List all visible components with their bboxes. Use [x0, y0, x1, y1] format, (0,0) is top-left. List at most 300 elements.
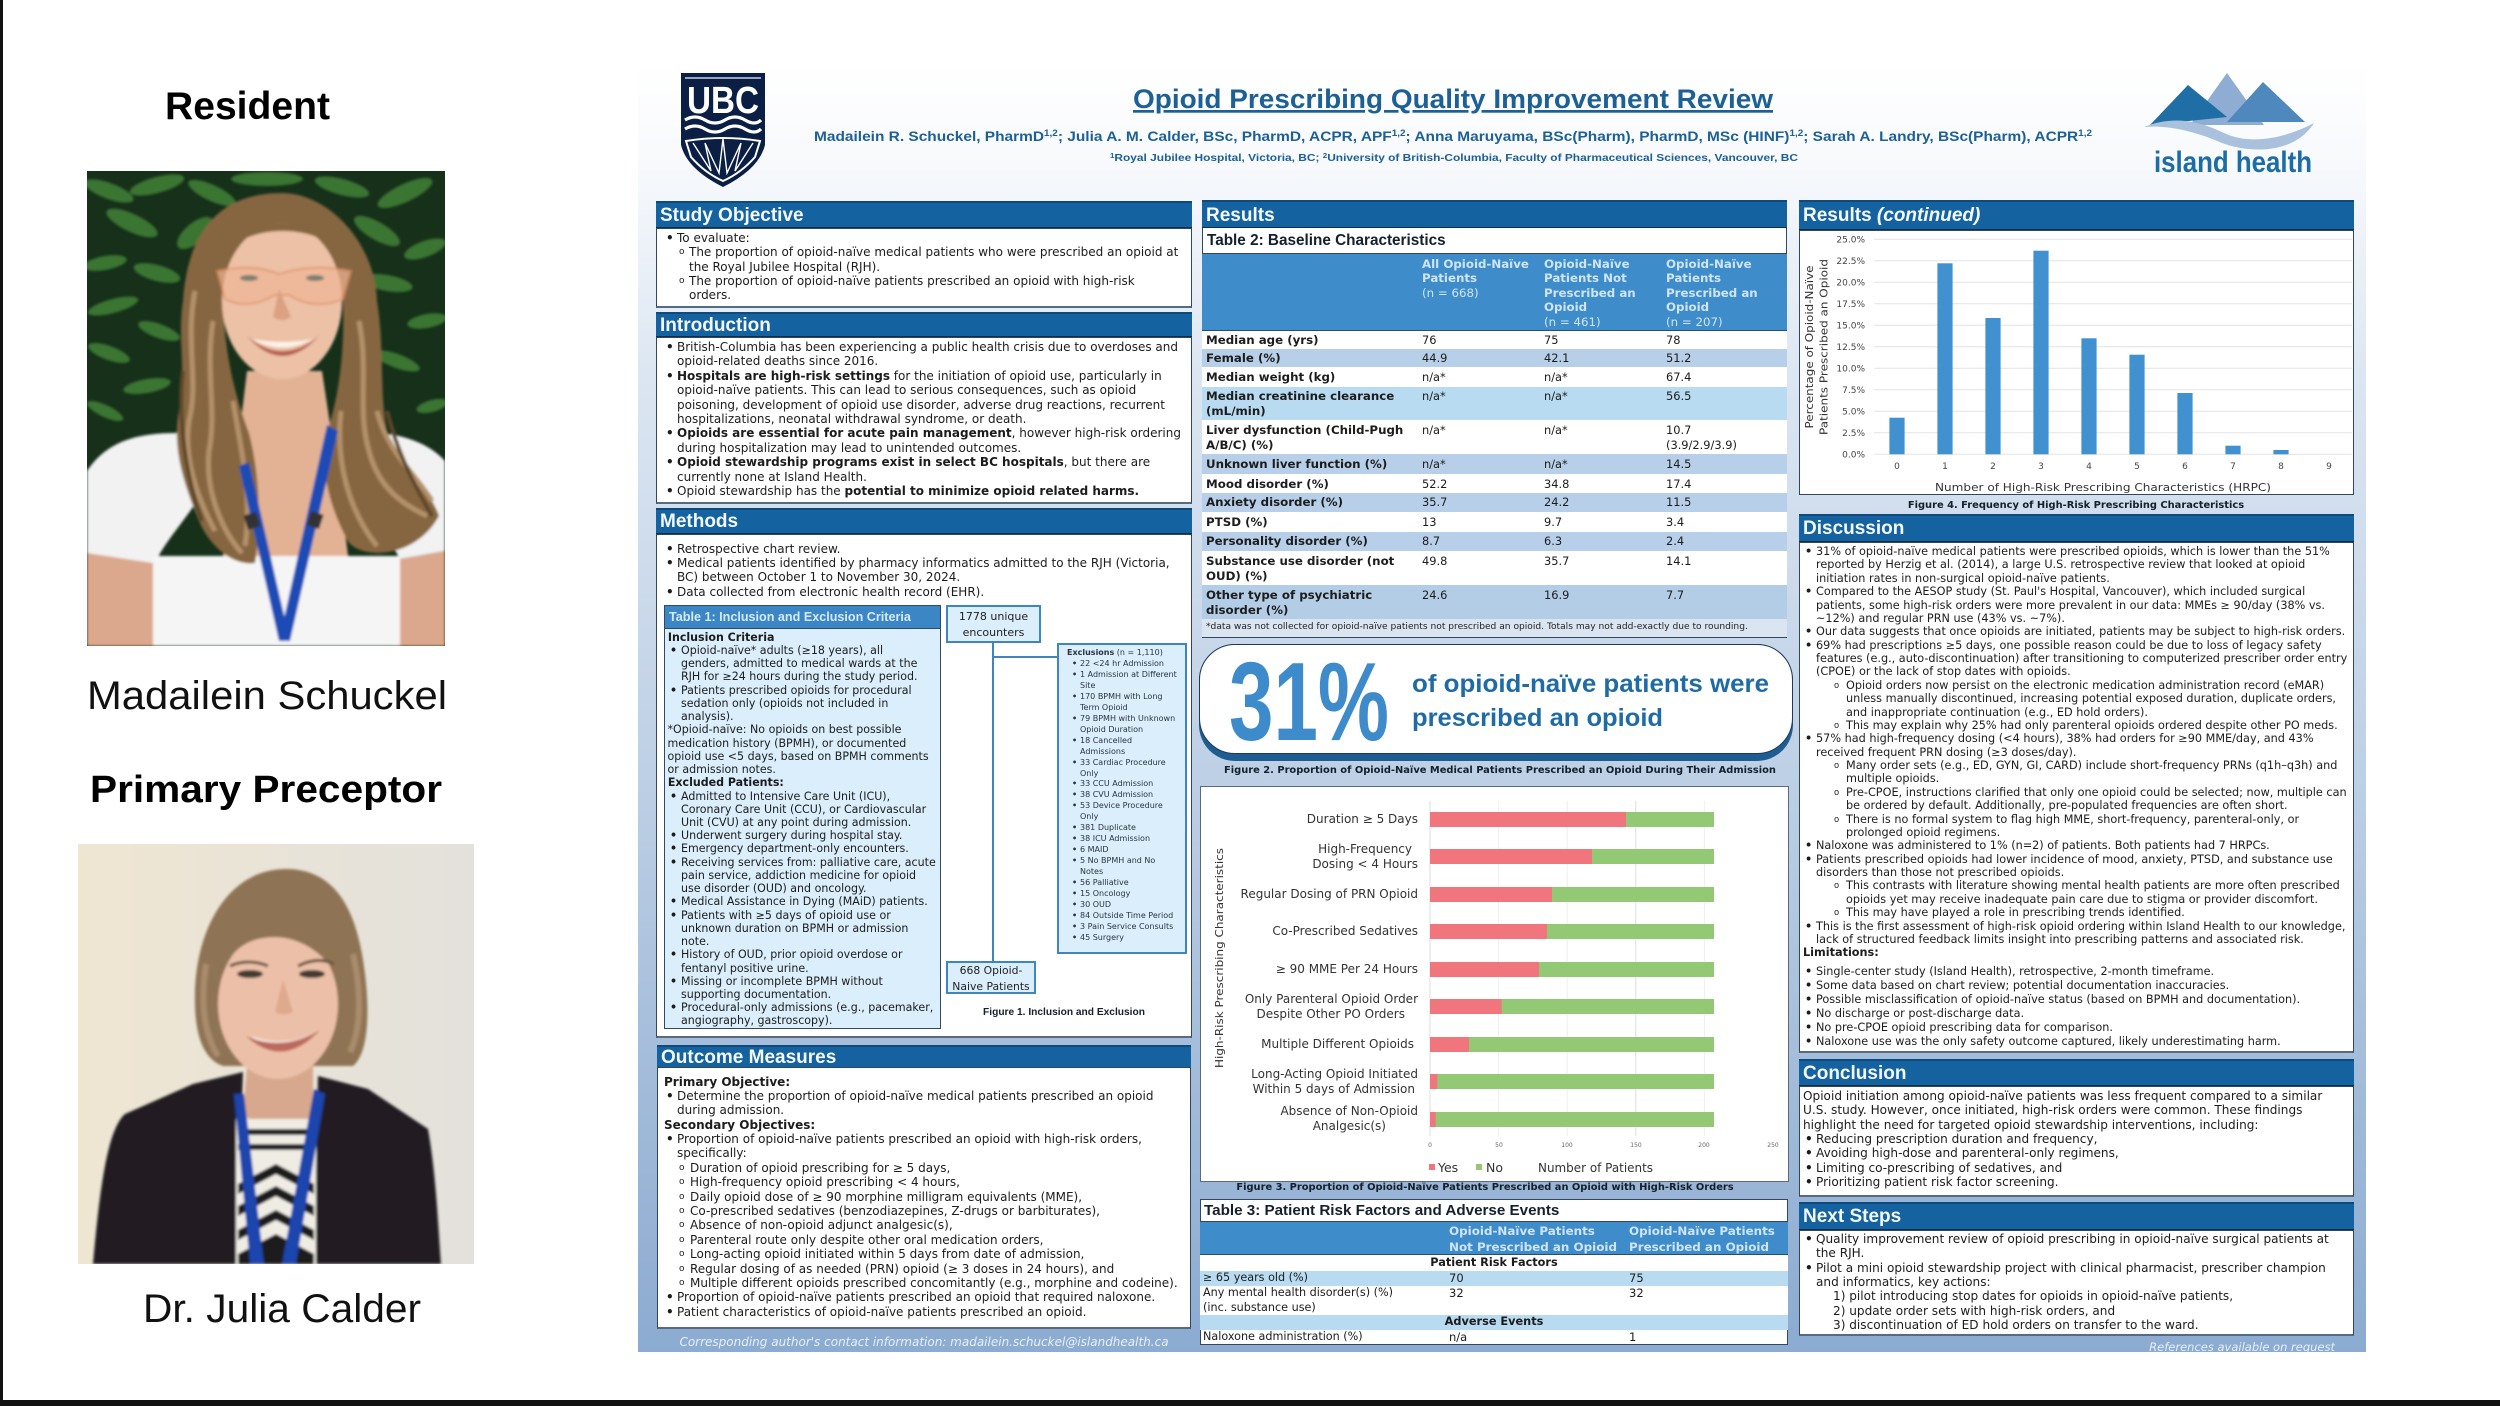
bars [1889, 251, 2289, 454]
table 2 row: substance use: 14.1 [1666, 554, 1691, 568]
table 2 row: mood: Mood disorder (%) [1206, 477, 1329, 491]
panel: study objective [656, 201, 1192, 308]
table 2 row: creatinine: (mL/min) [1206, 404, 1266, 418]
callout text: of opioid-naïve patients were [1412, 670, 1769, 698]
body: introduction [656, 337, 1192, 504]
table 1 text: use disorder (OUD) and oncology. [681, 882, 866, 895]
table 2 row: female: 44.9 [1422, 351, 1447, 365]
heading: outcome measures [657, 1045, 1191, 1068]
table 2 row: weight: 67.4 [1666, 370, 1691, 384]
category labels: Dosing < 4 Hours [1312, 857, 1418, 871]
text: discussion list [1803, 545, 2347, 959]
table 2 row: liver dysfunction [1202, 420, 1787, 454]
affiliations: University of British-Columbia, Faculty of Pharmaceutical Sciences, Vancouver, BC [1327, 152, 1798, 164]
table 2 row: unknown liver: n/a* [1544, 457, 1568, 471]
figure 1 caption: Figure 1. Inclusion and Exclusion [983, 1007, 1145, 1018]
table 2 header: Opioid-Naïve [1544, 257, 1630, 271]
affiliations [1110, 152, 1798, 164]
table 2 row: PTSD: 3.4 [1666, 515, 1684, 529]
table 2 row: mood: 17.4 [1666, 477, 1691, 491]
text: introduction list: Opioids are essential for acute pain management, however high-risk ordering [677, 426, 1181, 440]
table 2 row: female: 51.2 [1666, 351, 1691, 365]
table 2 row: anxiety: 35.7 [1422, 495, 1447, 509]
x axis ticks: 0 [1428, 1142, 1432, 1149]
callout: 31 percent [1199, 644, 1793, 761]
figure 1: exclusions text: Exclusions (n = 1,110) [1067, 648, 1163, 657]
table 1 text: Missing or incomplete BPMH without [681, 975, 883, 988]
text: conclusion [1803, 1089, 2322, 1189]
body: next steps [1799, 1230, 2354, 1336]
table 2 header: (n = 461) [1544, 315, 1601, 329]
category labels: Co-Prescribed Sedatives [1272, 924, 1418, 938]
text: objectives list: The proportion of opioid-naïve patients prescribed an opioid with high-risk [689, 274, 1135, 288]
table 2 row: other psychiatric: 16.9 [1544, 588, 1569, 602]
wavy hair [177, 193, 439, 563]
text: outcome measures list: specifically: [677, 1146, 747, 1160]
table 3 row: mental health: Any mental health disorder(s) (%) [1203, 1286, 1393, 1299]
text: outcome measures list: Parenteral route only despite other oral medication orders, [690, 1233, 1043, 1247]
table 1 text: Emergency department-only encounters. [681, 842, 909, 855]
table 2 row: liver dysfunction: n/a* [1544, 423, 1568, 437]
resident heading: Resident [165, 85, 330, 128]
heading: study objective [656, 201, 1192, 228]
figure 1: encounters box: 1778 unique [959, 610, 1028, 623]
primary preceptor heading: Primary Preceptor [90, 769, 442, 811]
figure 4 caption: Figure 4. Frequency of High-Risk Prescribing Characteristics [1908, 500, 2244, 511]
text: discussion list: ~12%) and regular PRN use (43% vs. ~7%). [1816, 612, 2065, 625]
text: conclusion: Prioritizing patient risk factor screening. [1816, 1175, 2059, 1189]
table 2 row: PTSD: PTSD (%) [1206, 515, 1268, 529]
table 2 row: median age: Median age (yrs) [1206, 333, 1319, 347]
text: conclusion: Limiting co-prescribing of sedatives, and [1816, 1161, 2062, 1175]
text: outcome measures list: Co-prescribed sedatives (benzodiazepines, Z-drugs or barbiturates), [690, 1204, 1100, 1218]
x axis ticks: 2 [1990, 462, 1996, 472]
table 2 row: substance use: Substance use disorder (not [1206, 554, 1394, 568]
table 3 title [1200, 1199, 1788, 1222]
text: outcome measures list: Proportion of opioid-naïve patients prescribed an opioid with high-risk orders, [677, 1132, 1142, 1146]
table 2 row: personality: 2.4 [1666, 534, 1684, 548]
heading: conclusion: Conclusion [1803, 1063, 1906, 1084]
shirt [87, 433, 197, 571]
table 1 text [668, 631, 936, 1027]
x axis ticks: 4 [2086, 462, 2092, 472]
legend: No [1486, 1160, 1503, 1175]
y axis ticks: 15.0% [1836, 322, 1865, 332]
figure 1: exclusions text: 6 MAID [1080, 845, 1109, 854]
table 2 header: Patients Not [1544, 271, 1627, 285]
text: discussion list: This may explain why 25% had only parenteral opioids ordered despite other PO meds. [1846, 719, 2338, 732]
table 1 text: History of OUD, prior opioid overdose or [681, 948, 902, 961]
figure 1: exclusions text: Site [1080, 681, 1095, 690]
table 2 row: personality: 8.7 [1422, 534, 1440, 548]
table 1 text: Excluded Patients: [668, 776, 784, 789]
table 2 header [1202, 254, 1787, 331]
table 2 row: unknown liver [1202, 454, 1787, 474]
table 1 text: Admitted to Intensive Care Unit (ICU), [681, 790, 890, 802]
x axis ticks: 3 [2038, 462, 2044, 472]
text: discussion list: This is the first assessment of high-risk opioid ordering within Island Health to our knowledge, [1816, 920, 2345, 933]
body: study objective [656, 228, 1192, 308]
text: introduction list: poisoning, development of opioid use disorder, adverse drug reactions, recurrent [677, 398, 1165, 412]
text: conclusion: Avoiding high-dose and parenteral-only regimens, [1816, 1146, 2119, 1160]
figure 1: exclusions text: 30 OUD [1080, 900, 1111, 909]
chest [222, 371, 349, 563]
text: discussion list: lack of structured feedback limits insight into prescribing patterns and associated risk. [1816, 933, 2304, 946]
blazer [93, 1072, 243, 1264]
top stripes [236, 1119, 316, 1264]
text: limitations list: Some data based on chart review; potential documentation inaccuracies. [1816, 979, 2229, 992]
photo: resident portrait [87, 171, 445, 646]
y axis ticks: 22.5% [1836, 257, 1865, 267]
table 2 row: weight: Median weight (kg) [1206, 370, 1335, 384]
table 3 header [1200, 1222, 1788, 1255]
heading: results [1202, 200, 1787, 228]
text: limitations list: Possible misclassification of opioid-naïve status (based on BPMH and documentation). [1816, 993, 2300, 1006]
affiliations: Royal Jubilee Hospital, Victoria, BC; [1114, 152, 1323, 164]
text: discussion list: Our data suggests that once opioids are initiated, patients may be subject to high-risk orders. [1816, 625, 2345, 638]
figure 1: exclusions text: 15 Oncology [1080, 889, 1130, 898]
body: discussion [1799, 542, 2354, 1053]
table 2 row: personality: Personality disorder (%) [1206, 534, 1368, 548]
figure 1: exclusions text: 45 Surgery [1080, 933, 1124, 942]
text: discussion list: features (e.g., auto-discontinuation) after transitioning to computerized prescriber order entry [1816, 652, 2347, 665]
table 2 row: anxiety: Anxiety disorder (%) [1206, 495, 1343, 509]
text: objectives list: The proportion of opioid-naïve medical patients who were prescribed an opioid at [689, 245, 1178, 259]
table 2 title: Table 2: Baseline Characteristics [1207, 232, 1446, 249]
figure 1: exclusions text: Only [1080, 812, 1098, 821]
table 2 row: liver dysfunction: Liver dysfunction (Child-Pugh [1206, 423, 1403, 437]
icon: UBC logo [681, 73, 765, 187]
text: introduction list: hospitalizations, neonatal withdrawal syndrome, or death. [677, 412, 1026, 426]
table 2 row: PTSD [1202, 512, 1787, 532]
figure 1: encounters box [946, 605, 1041, 643]
table 1 text: Medical Assistance in Dying (MAiD) patients. [681, 895, 928, 908]
table 3 row: naloxone: 1 [1629, 1330, 1636, 1344]
figure 1: exclusions text: 38 ICU Admission [1080, 834, 1150, 843]
table 2 row: creatinine: 56.5 [1666, 389, 1691, 403]
figure 1: flow connector vertical [992, 642, 994, 961]
table 2 header: Opioid [1666, 300, 1709, 314]
table 2 row: other psychiatric: Other type of psychiatric [1206, 588, 1372, 602]
text: introduction list: British-Columbia has been experiencing a public health crisis due to overdoses and [677, 340, 1178, 354]
text: methods list: Medical patients identified by pharmacy informatics admitted to the RJH (Victoria, [677, 556, 1170, 570]
table 2 row: anxiety: 24.2 [1544, 495, 1569, 509]
table 2 row: other psychiatric: 24.6 [1422, 588, 1447, 602]
category labels: High-Frequency [1318, 842, 1412, 856]
text: next steps list [1806, 1232, 2329, 1332]
slide border bottom [0, 1400, 2500, 1406]
panel: introduction [656, 312, 1192, 504]
y axis title: Patients Prescribed an Opioid [1818, 259, 1830, 435]
x axis ticks: 8 [2278, 462, 2284, 472]
text: outcome measures list: High-frequency opioid prescribing < 4 hours, [690, 1175, 960, 1189]
x axis ticks: 0 [1894, 462, 1900, 472]
figure 1: encounters box: encounters [963, 626, 1024, 639]
figure 3: stacked bar chart [1200, 786, 1789, 1182]
table 1 text: supporting documentation. [681, 988, 831, 1001]
photo: preceptor portrait [78, 844, 474, 1264]
lanyard [234, 1094, 264, 1264]
text: discussion list: This may have played a role in prescribing trends identified. [1846, 906, 2185, 919]
category labels: Only Parenteral Opioid Order [1245, 992, 1418, 1006]
figure 1: exclusions text: 33 Cardiac Procedure [1080, 758, 1166, 767]
text: introduction list: currently none at Island Health. [677, 470, 867, 484]
heading: next steps [1799, 1202, 2354, 1230]
callout text: prescribed an opioid [1412, 704, 1663, 732]
y axis ticks: 5.0% [1842, 408, 1865, 418]
text: next steps list: and informatics, key actions: [1816, 1275, 1991, 1289]
table 2 row: weight: n/a* [1422, 370, 1446, 384]
figure 1: exclusions text: 381 Duplicate [1080, 823, 1136, 832]
table 2 row: substance use: 49.8 [1422, 554, 1447, 568]
text: limitations list: No discharge or post-discharge data. [1816, 1007, 2024, 1020]
text: introduction list: Hospitals are high-risk settings for the initiation of opioid use, particularly in [677, 369, 1162, 383]
affiliations: 2 [1323, 153, 1327, 160]
table 1 text: Opioid-naïve* adults (≥18 years), all [681, 644, 883, 657]
authors [814, 128, 2092, 144]
table 1 text: fentanyl positive urine. [681, 962, 809, 975]
table 2 row: unknown liver: 14.5 [1666, 457, 1691, 471]
table 2 row: median age: 78 [1666, 333, 1680, 347]
text: methods list: Retrospective chart review. [677, 542, 840, 556]
figure 1: final cohort box: Naive Patients [952, 980, 1030, 993]
authors: ; Sarah A. Landry, BSc(Pharm), ACPR [1803, 128, 2078, 144]
table 1 heading [664, 605, 941, 629]
table 2 row: weight: n/a* [1544, 370, 1568, 384]
heading: discussion: Discussion [1803, 518, 1904, 539]
table 2 footnote [1202, 619, 1787, 638]
figure 1: final cohort box [946, 961, 1036, 994]
table 1 text: medication history (BPMH), or documented [668, 737, 906, 750]
x axis ticks: 1 [1942, 462, 1948, 472]
table 1 text: genders, admitted to medical wards at the [681, 657, 917, 670]
text: methods list: BC) between October 1 to November 30, 2024. [677, 570, 960, 584]
category labels: Analgesic(s) [1313, 1119, 1386, 1133]
figure 1: exclusions text: 56 Palliative [1080, 878, 1129, 887]
text: discussion list: Limitations: [1803, 946, 1879, 959]
callout text [1229, 644, 1769, 761]
text: introduction list: opioid-naïve patients. This can lead to serious consequences, such as opioid [677, 383, 1136, 397]
text: next steps list: 1) pilot introducing stop dates for opioids in opioid-naïve patients, [1833, 1289, 2233, 1303]
table 2 row: other psychiatric: disorder (%) [1206, 603, 1288, 617]
text: limitations list [1806, 965, 2300, 1048]
callout shape [1199, 644, 1793, 761]
table 2 header: (n = 668) [1422, 286, 1479, 300]
text: outcome measures list: Determine the proportion of opioid-naïve medical patients prescribed an opioid [677, 1089, 1153, 1103]
table 3 row: age [1200, 1271, 1788, 1286]
figure 2 caption: Figure 2. Proportion of Opioid-Naïve Medical Patients Prescribed an Opioid During Their Admission [1224, 765, 1776, 776]
table 1 text: angiography, gastroscopy). [681, 1014, 832, 1027]
text: discussion list: multiple opioids. [1846, 772, 1939, 785]
category labels: Multiple Different Opioids [1261, 1037, 1414, 1051]
table 1 body [664, 629, 941, 1029]
footer: contact info: Corresponding author's contact information: madailein.schuckel@islandhealth.ca [679, 1335, 1169, 1349]
figure 1: exclusions text: 18 Cancelled [1080, 736, 1132, 745]
authors: 1,2 [1789, 128, 1803, 138]
table 2 row: weight [1202, 367, 1787, 387]
table 2 header: Opioid [1544, 300, 1587, 314]
authors: ; Anna Maruyama, BSc(Pharm), PharmD, MSc (HINF) [1406, 128, 1789, 144]
table 2 header: (n = 207) [1666, 315, 1723, 329]
heading: methods: Methods [660, 511, 738, 532]
table 2 row: mood: 52.2 [1422, 477, 1447, 491]
table 2 row: liver dysfunction: n/a* [1422, 423, 1446, 437]
table 3 row: age: 75 [1629, 1271, 1644, 1285]
category labels: Regular Dosing of PRN Opioid [1241, 887, 1418, 901]
text: methods list: Data collected from electronic health record (EHR). [677, 585, 984, 599]
authors: 1,2 [2078, 128, 2092, 138]
text: discussion list: reported by Herzig et al. (2014), a large U.S. retrospective review that looked at opioid [1816, 558, 2305, 571]
table 2 row: female: 42.1 [1544, 351, 1569, 365]
x axis ticks: 50 [1495, 1142, 1503, 1149]
text: outcome measures list: Proportion of opioid-naïve patients prescribed an opioid that required naloxone. [677, 1290, 1155, 1304]
text: discussion list: unless manually discontinued, increasing potential exposed duration, duplicate orders, [1846, 692, 2336, 705]
x axis ticks: 250 [1767, 1142, 1779, 1149]
table 1 text: note. [681, 935, 709, 948]
callout inner card [1199, 644, 1793, 754]
authors: Madailein R. Schuckel, PharmD [814, 128, 1023, 144]
table 2 row: anxiety: 11.5 [1666, 495, 1691, 509]
text: discussion list: Pre-CPOE, instructions clarified that only one opioid could be selected; now, multiple can [1846, 786, 2347, 799]
table 3 row: naloxone: Naloxone administration (%) [1203, 1330, 1363, 1343]
face [222, 223, 342, 379]
table 2 row: creatinine: n/a* [1544, 389, 1568, 403]
resident name: Madailein Schuckel [87, 674, 447, 718]
hair [195, 869, 367, 1066]
text: discussion list: (CPOE) or the lack of stop dates with opioids. [1816, 665, 2071, 678]
table 2 row: unknown liver: n/a* [1422, 457, 1446, 471]
table 2 header: Opioid-Naïve [1666, 257, 1752, 271]
x axis ticks: 7 [2230, 462, 2236, 472]
table 1 text: sedation only (opioids not included in [681, 697, 888, 710]
table 2 row: creatinine: n/a* [1422, 389, 1446, 403]
text: objectives list [668, 231, 1178, 302]
table 2 row: liver dysfunction: (3.9/2.9/3.9) [1666, 438, 1737, 452]
x axis ticks: 5 [2134, 462, 2140, 472]
figure 1: exclusions text: 84 Outside Time Period [1080, 911, 1173, 920]
authors: 1,2 [1392, 128, 1406, 138]
figure 1: exclusions text: Opioid Duration [1080, 725, 1143, 734]
panel: next steps [1799, 1202, 2354, 1336]
lanyard [239, 462, 290, 641]
category labels: Long-Acting Opioid Initiated [1251, 1067, 1418, 1081]
table 2 row: creatinine: Median creatinine clearance [1206, 389, 1394, 403]
table 2 row: substance use: OUD) (%) [1206, 569, 1268, 583]
text: introduction list: Opioid stewardship programs exist in select BC hospitals, but there are [677, 455, 1150, 469]
y axis ticks: 2.5% [1842, 429, 1865, 439]
x axis ticks [1428, 1142, 1779, 1149]
text: introduction list: opioid-related deaths since 2016. [677, 354, 878, 368]
text: discussion list: patients, some high-risk orders were more prevalent in our data: MMEs ≥ 90/day (38% vs. [1816, 599, 2325, 612]
figure 1: exclusions text: 3 Pain Service Consults [1080, 922, 1173, 931]
table 1 text: analysis). [681, 710, 734, 723]
table 2 row: median age [1202, 331, 1787, 349]
text: discussion list: This contrasts with literature showing mental health patients are more often prescribed [1846, 879, 2340, 892]
bars [1430, 812, 1714, 1127]
category labels: Duration ≥ 5 Days [1307, 812, 1418, 826]
text: discussion list: received frequent PRN dosing (≥3 doses/day). [1816, 746, 2077, 759]
text: introduction list: Opioid stewardship has the potential to minimize opioid related harms. [677, 484, 1139, 498]
legend [1429, 1160, 1653, 1175]
neck [243, 1054, 313, 1144]
preceptor name: Dr. Julia Calder [143, 1287, 421, 1331]
x axis ticks: 9 [2326, 462, 2332, 472]
text: outcome measures list: Primary Objective: [664, 1074, 790, 1088]
text: objectives list: orders. [689, 288, 731, 302]
text: objectives list: To evaluate: [677, 231, 750, 245]
text: discussion list: 31% of opioid-naïve medical patients were prescribed opioids, which is lower than the 51% [1816, 545, 2330, 558]
table 2 row: median age: 75 [1544, 333, 1558, 347]
table 1 text: unknown duration on BPMH or admission [681, 922, 908, 935]
heading: next steps: Next Steps [1803, 1206, 1901, 1227]
figure 1: exclusions text: Only [1080, 768, 1098, 778]
table 1 text: Procedural-only admissions (e.g., pacemaker, [681, 1001, 933, 1014]
table 2 header: All Opioid-Naïve [1422, 257, 1529, 271]
heading: study objective: Study Objective [660, 205, 804, 226]
panel: results continued [1799, 200, 2354, 495]
table 2 row: unknown liver: Unknown liver function (%) [1206, 457, 1387, 471]
text: discussion list: Naloxone was administered to 1% (n=2) of patients. Both patients had 7 HRPCs. [1816, 839, 2270, 852]
authors: 1,2 [1044, 128, 1058, 138]
table 3 header: Opioid-Naïve Patients [1629, 1224, 1775, 1238]
y axis ticks [1836, 236, 1865, 460]
text: next steps list: Quality improvement review of opioid prescribing in opioid-naïve surgical patients at [1816, 1232, 2329, 1246]
heading: results: Results [1206, 205, 1275, 226]
text: limitations list: Single-center study (Island Health), retrospective, 2-month timeframe. [1816, 965, 2214, 978]
table 2 row: female: Female (%) [1206, 351, 1281, 365]
heading: introduction: Introduction [660, 315, 771, 336]
heading: methods [656, 508, 1192, 534]
table 2 title [1202, 228, 1787, 254]
heading: conclusion [1799, 1059, 2354, 1086]
table 2 row: creatinine [1202, 387, 1787, 420]
text: next steps list: 2) update order sets with high-risk orders, and [1833, 1304, 2115, 1318]
text: discussion list: Opioid orders now persist on the electronic medication administration record (eMAR) [1846, 679, 2324, 692]
legend: Number of Patients [1538, 1160, 1653, 1175]
table 3 row: age: ≥ 65 years old (%) [1203, 1271, 1308, 1284]
table 3 row: age: 70 [1449, 1271, 1464, 1285]
figure 1: exclusions text: 38 CVU Admission [1080, 790, 1153, 799]
text: discussion list: Patients prescribed opioids had lower incidence of mood, anxiety, PTSD, and substance use [1816, 853, 2333, 866]
panel: outcome measures [657, 1045, 1191, 1329]
table 2 footnote: *data was not collected for opioid-naïve patients not prescribed an opioid. Totals may not add-exactly due to rounding. [1206, 622, 1748, 632]
table 1 text: Underwent surgery during hospital stay. [681, 829, 902, 842]
table 1 text: Receiving services from: palliative care, acute [681, 856, 936, 869]
table 1 heading: Table 1: Inclusion and Exclusion Criteria [669, 610, 911, 624]
table 2 row: median age: 76 [1422, 333, 1436, 347]
text: discussion list: Compared to the AESOP study (St. Paul's Hospital, Vancouver), which included surgical [1816, 585, 2305, 598]
table 3 row: mental health: 32 [1449, 1286, 1464, 1300]
x axis ticks: 150 [1630, 1142, 1642, 1149]
heading: results continued [1799, 200, 2354, 230]
text: next steps list: Pilot a mini opioid stewardship project with clinical pharmacist, prescriber champion [1816, 1261, 2326, 1275]
figure 1: final cohort box: 668 Opioid- [960, 964, 1022, 977]
body: conclusion [1799, 1086, 2354, 1197]
text: conclusion: highlight the need for targeted opioid stewardship interventions, including: [1803, 1118, 2259, 1132]
figure 1: exclusions text: 170 BPMH with Long [1080, 692, 1162, 701]
legend: Yes [1437, 1160, 1458, 1175]
heading: discussion [1799, 514, 2354, 542]
table 2 row: substance use [1202, 551, 1787, 585]
table 1 text: Patients prescribed opioids for procedural [681, 684, 912, 697]
category labels: Within 5 days of Admission [1253, 1082, 1415, 1096]
table 2 row: PTSD: 9.7 [1544, 515, 1562, 529]
text: conclusion: Reducing prescription duration and frequency, [1816, 1132, 2097, 1146]
table 3 header: Prescribed an Opioid [1629, 1240, 1769, 1254]
text: outcome measures list: Long-acting opioid initiated within 5 days from date of admission, [690, 1247, 1084, 1261]
text: next steps list: the RJH. [1816, 1246, 1864, 1260]
heading: outcome measures: Outcome Measures [661, 1047, 836, 1068]
